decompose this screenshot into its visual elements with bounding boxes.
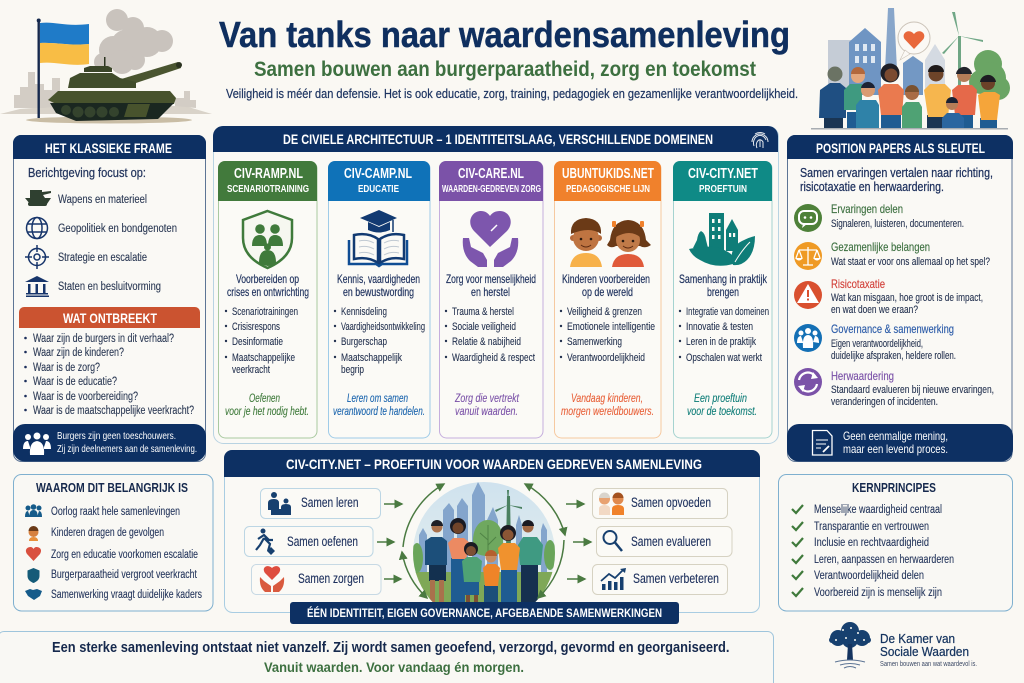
item: herwaardering: Herwaardering bbox=[831, 369, 894, 383]
card: CIV-CITY.NET: brengen bbox=[707, 285, 739, 299]
card: CIV-CITY.NET: voor de toekomst. bbox=[687, 404, 757, 418]
box: samen oefenen bbox=[244, 526, 373, 556]
panel: het klassieke frame: Geopolitiek en bondgenoten bbox=[58, 223, 177, 235]
panel: slotboodschap: Een sterke samenleving ontstaat niet vanzelf. Zij wordt samen geoefend, verzorgd, gevormd en georganiseerd. bbox=[52, 640, 730, 656]
card: CIV-CAMP.NL: Maatschappelijk bbox=[341, 352, 402, 364]
card: UBUNTUKIDS.NET: UBUNTUKIDS.NET bbox=[562, 166, 654, 182]
list: vragen: Waar zijn de kinderen? bbox=[33, 347, 124, 359]
card: CIV-CARE.NL: Sociale veiligheid bbox=[452, 321, 516, 333]
list: principes bbox=[792, 504, 954, 599]
card: CIV-RAMP.NL: Scenariotrainingen bbox=[232, 306, 298, 318]
list: principes: Leren, aanpassen en herwaarderen bbox=[814, 554, 954, 566]
card: UBUNTUKIDS.NET: Kinderen voorbereiden bbox=[562, 272, 650, 286]
icon: people bbox=[25, 504, 42, 517]
panel: waarom dit belangrijk is bbox=[14, 474, 213, 611]
panel: kernprincipes bbox=[778, 474, 1012, 611]
card: UBUNTUKIDS.NET: Emotionele intelligentie bbox=[567, 321, 655, 333]
icon: shield bbox=[28, 568, 40, 583]
item: ervaringen delen: Ervaringen delen bbox=[831, 202, 903, 216]
list: vragen bbox=[24, 333, 194, 417]
card: UBUNTUKIDS.NET bbox=[554, 161, 661, 438]
panel: het klassieke frame: Strategie en escalatie bbox=[58, 252, 147, 264]
box: samen opvoeden: Samen opvoeden bbox=[631, 495, 711, 510]
callout: burgers: Zij zijn deelnemers aan de samenleving. bbox=[57, 443, 197, 455]
heading: WAAROM DIT BELANGRIJK IS bbox=[36, 481, 188, 495]
icon: city and leaf bbox=[689, 213, 755, 266]
card: CIV-CITY.NET bbox=[673, 161, 772, 438]
card: CIV-CITY.NET: Integratie van domeinen bbox=[686, 306, 769, 318]
card: CIV-RAMP.NL: veerkracht bbox=[232, 364, 270, 376]
subtitle: Samen bouwen aan burgerparaatheid, zorg en toekomst bbox=[254, 58, 756, 81]
title: Van tanks naar waardensamenleving bbox=[219, 14, 790, 55]
list: vragen: Waar is de educatie? bbox=[33, 376, 117, 388]
box: samen leren bbox=[260, 488, 380, 518]
logo: de kamer van sociale waarden: Sociale Waarden bbox=[880, 644, 969, 659]
icon: tank bbox=[25, 190, 51, 206]
card: CIV-CITY.NET: Een proeftuin bbox=[694, 391, 747, 405]
card: CIV-CAMP.NL: CIV-CAMP.NL bbox=[344, 166, 412, 182]
icon: child bbox=[28, 526, 38, 541]
card: CIV-CITY.NET: PROEFTUIN bbox=[699, 183, 747, 195]
heading: CIV-CITY.NET – PROEFTUIN VOOR WAARDEN GEDREVEN SAMENLEVING bbox=[286, 457, 702, 472]
tagline: Veiligheid is méér dan defensie. Het is ook educatie, zorg, training, pedagogiek en gezamenlijke verantwoordelijkheid. bbox=[226, 87, 798, 101]
figures bbox=[819, 64, 1000, 128]
item: risicotaxatie: Risicotaxatie bbox=[831, 277, 885, 291]
item: governance en samenwerking: Governance & samenwerking bbox=[831, 322, 954, 336]
card: UBUNTUKIDS.NET: Vandaag kinderen, bbox=[571, 391, 643, 405]
card: CIV-CITY.NET: Samenhang in praktijk bbox=[679, 272, 768, 286]
list: principes: Verantwoordelijkheid delen bbox=[814, 570, 924, 582]
panel: het klassieke frame: Wapens en materieel bbox=[58, 194, 147, 206]
card: CIV-CITY.NET: Innovatie & testen bbox=[686, 321, 753, 333]
item: gezamenlijke belangen: Gezamenlijke belangen bbox=[831, 240, 930, 254]
callout: burgers bbox=[13, 424, 206, 462]
card: UBUNTUKIDS.NET: Veiligheid & grenzen bbox=[567, 306, 642, 318]
card: CIV-RAMP.NL: SCENARIOTRAINING bbox=[227, 183, 309, 195]
card: UBUNTUKIDS.NET: morgen wereldbouwers. bbox=[561, 404, 654, 418]
box: samen zorgen bbox=[252, 564, 381, 594]
card: CIV-CARE.NL: en herstel bbox=[471, 285, 510, 299]
arrows: left inputs bbox=[377, 504, 402, 579]
card: CIV-RAMP.NL: Maatschappelijke bbox=[232, 352, 295, 364]
list: vragen: Waar zijn de burgers in dit verhaal? bbox=[33, 333, 174, 345]
card: CIV-CAMP.NL: Kennis, vaardigheden bbox=[337, 272, 420, 286]
card: CIV-RAMP.NL: Voorbereiden op bbox=[236, 272, 299, 286]
panel: position papers als sleutel bbox=[787, 135, 1013, 462]
arrows: right outputs bbox=[566, 504, 591, 579]
card: CIV-CAMP.NL: en bewustwording bbox=[343, 285, 414, 299]
card: CIV-RAMP.NL: voor je het nodig hebt. bbox=[225, 404, 309, 418]
card: CIV-CARE.NL: WAARDEN-GEDREVEN ZORG bbox=[442, 184, 541, 195]
item: governance en samenwerking bbox=[794, 322, 956, 362]
icon: institution bbox=[25, 276, 49, 297]
panel: de civiele architectuur bbox=[213, 126, 778, 444]
item: risicotaxatie: en wat doen we eraan? bbox=[831, 304, 918, 316]
icon: shield with people bbox=[243, 211, 292, 268]
heading: DE CIVIELE ARCHITECTUUR – 1 IDENTITEITSLAAG, VERSCHILLENDE DOMEINEN bbox=[283, 132, 713, 147]
item: governance en samenwerking: Eigen verantwoordelijkheid, bbox=[831, 338, 923, 350]
card: UBUNTUKIDS.NET: PEDAGOGISCHE LIJN bbox=[566, 183, 650, 195]
card: CIV-CAMP.NL bbox=[328, 161, 430, 438]
box: samen oefenen: Samen oefenen bbox=[287, 534, 358, 549]
list: vragen: Waar is de voorbereiding? bbox=[33, 391, 138, 403]
panel: het klassieke frame bbox=[13, 135, 206, 462]
sub-panel: wat ontbreekt bbox=[19, 307, 200, 328]
icon: book and graduation cap bbox=[349, 210, 407, 266]
icon: heart in hands bbox=[463, 211, 518, 267]
item: herwaardering: veranderingen of incidenten. bbox=[831, 396, 938, 408]
card: CIV-CAMP.NL: Vaardigheidsontwikkeling bbox=[341, 321, 425, 333]
card: CIV-CAMP.NL: verantwoord te handelen. bbox=[333, 404, 425, 418]
panel: slotboodschap: Vanuit waarden. Voor vandaag én morgen. bbox=[264, 659, 524, 675]
item: ervaringen delen: Signaleren, luisteren, documenteren. bbox=[831, 218, 964, 230]
card: CIV-CAMP.NL: Burgerschap bbox=[341, 336, 387, 348]
icon: handshake bbox=[25, 589, 42, 600]
item: risicotaxatie bbox=[794, 277, 983, 316]
panel: position papers als sleutel: risicotaxatie en herwaardering. bbox=[800, 179, 944, 194]
heading: KERNPRINCIPES bbox=[852, 481, 936, 495]
icon: fingerprint bbox=[752, 132, 768, 148]
box: samen verbeteren: Samen verbeteren bbox=[633, 571, 719, 586]
card: CIV-CITY.NET: Leren in de praktijk bbox=[686, 336, 756, 348]
card: UBUNTUKIDS.NET: op de wereld bbox=[582, 285, 633, 299]
illustration: tank with Ukrainian flag bbox=[0, 9, 212, 124]
item: ervaringen delen bbox=[794, 202, 964, 232]
intro text: Berichtgeving focust op: bbox=[28, 165, 146, 180]
card: CIV-CITY.NET: Opschalen wat werkt bbox=[686, 352, 762, 364]
panel: waarom dit belangrijk is: Zorg en educatie voorkomen escalatie bbox=[51, 549, 198, 561]
item: governance en samenwerking: duidelijke afspraken, heldere rollen. bbox=[831, 350, 956, 362]
logo: de kamer van sociale waarden: Samen bouwen aan wat waardevol is. bbox=[880, 661, 977, 668]
panel: waarom dit belangrijk is: Kinderen dragen de gevolgen bbox=[51, 527, 164, 539]
box: samen evalueren: Samen evalueren bbox=[631, 534, 711, 549]
card: CIV-CARE.NL: Zorg voor menselijkheid bbox=[446, 272, 536, 286]
icon: heart bbox=[26, 547, 41, 561]
icon: two children bbox=[570, 218, 651, 267]
card: CIV-CARE.NL: vanuit waarden. bbox=[455, 404, 518, 418]
logo: de kamer van sociale waarden: De Kamer van bbox=[880, 631, 955, 646]
box: samen leren: Samen leren bbox=[301, 495, 358, 510]
item: herwaardering bbox=[794, 368, 994, 408]
panel: het klassieke frame: Staten en besluitvorming bbox=[58, 281, 161, 293]
callout: levend proces: maar een levend proces. bbox=[843, 442, 948, 456]
logo: de kamer van sociale waarden bbox=[829, 622, 977, 668]
illustration: community circle bbox=[413, 482, 555, 602]
callout: levend proces: Geen eenmalige mening, bbox=[843, 429, 948, 443]
icon: globe bbox=[26, 218, 48, 238]
list: principes: Voorbereid zijn is menselijk zijn bbox=[814, 587, 942, 599]
figures in circle bbox=[425, 518, 543, 605]
card: CIV-CARE.NL bbox=[439, 161, 543, 438]
card: UBUNTUKIDS.NET: Verantwoordelijkheid bbox=[567, 352, 645, 364]
card: CIV-RAMP.NL: Crisisrespons bbox=[232, 321, 280, 333]
card: CIV-CARE.NL: Relatie & nabijheid bbox=[452, 336, 521, 348]
illustration: community and city bbox=[811, 8, 1010, 130]
box: samen verbeteren bbox=[592, 564, 728, 594]
list: principes: Menselijke waardigheid centraal bbox=[814, 504, 942, 516]
card: CIV-CARE.NL: Trauma & herstel bbox=[452, 306, 514, 318]
list: vragen: Waar is de zorg? bbox=[33, 362, 100, 374]
banner: identiteit bbox=[290, 602, 679, 624]
card: CIV-CAMP.NL: Kennisdeling bbox=[341, 306, 387, 318]
card: CIV-CARE.NL: Waardigheid & respect bbox=[452, 352, 535, 364]
panel: waarom dit belangrijk is: Samenwerking vraagt duidelijke kaders bbox=[51, 589, 202, 601]
box: samen evalueren bbox=[596, 526, 732, 556]
icon: crosshair bbox=[25, 245, 49, 269]
list: principes: Inclusie en rechtvaardigheid bbox=[814, 537, 929, 549]
panel: waarom dit belangrijk is: Oorlog raakt hele samenlevingen bbox=[51, 506, 180, 518]
arrows: cycle ring bbox=[402, 484, 565, 598]
card: CIV-RAMP.NL: Desinformatie bbox=[232, 336, 283, 348]
card: CIV-RAMP.NL: crises en ontwrichting bbox=[227, 285, 309, 299]
heading: HET KLASSIEKE FRAME bbox=[45, 141, 172, 156]
card: UBUNTUKIDS.NET: Samenwerking bbox=[567, 336, 622, 348]
card: CIV-RAMP.NL bbox=[218, 161, 317, 438]
callout: levend proces bbox=[787, 424, 1013, 462]
list: vragen: Waar is de maatschappelijke veerkracht? bbox=[33, 405, 194, 417]
card: CIV-CAMP.NL: EDUCATIE bbox=[358, 183, 399, 195]
panel: civ-city proeftuin bbox=[224, 450, 760, 624]
card: CIV-CAMP.NL: begrip bbox=[341, 364, 364, 376]
panel: waarom dit belangrijk is: Burgerparaatheid vergroot veerkracht bbox=[51, 569, 198, 581]
list: principes: Transparantie en vertrouwen bbox=[814, 521, 929, 533]
item: gezamenlijke belangen bbox=[794, 240, 990, 270]
callout: burgers: Burgers zijn geen toeschouwers. bbox=[57, 430, 176, 442]
card: CIV-RAMP.NL: Oefenen bbox=[249, 391, 280, 405]
banner: identiteit: ÉÉN IDENTITEIT, EIGEN GOVERNANCE, AFGEBAENDE SAMENWERKINGEN bbox=[307, 607, 662, 620]
card: CIV-CITY.NET: CIV-CITY.NET bbox=[688, 166, 758, 182]
card: CIV-RAMP.NL: CIV-RAMP.NL bbox=[234, 166, 303, 182]
card: CIV-CARE.NL: Zorg die vertrekt bbox=[454, 391, 519, 405]
panel: het klassieke frame: WAT ONTBREEKT bbox=[63, 311, 158, 326]
box: samen zorgen: Samen zorgen bbox=[298, 571, 364, 586]
panel: slotboodschap bbox=[0, 632, 774, 683]
card: CIV-CARE.NL: CIV-CARE.NL bbox=[458, 166, 524, 182]
card: CIV-CAMP.NL: Leren om samen bbox=[347, 391, 408, 405]
box: samen opvoeden bbox=[592, 488, 728, 518]
